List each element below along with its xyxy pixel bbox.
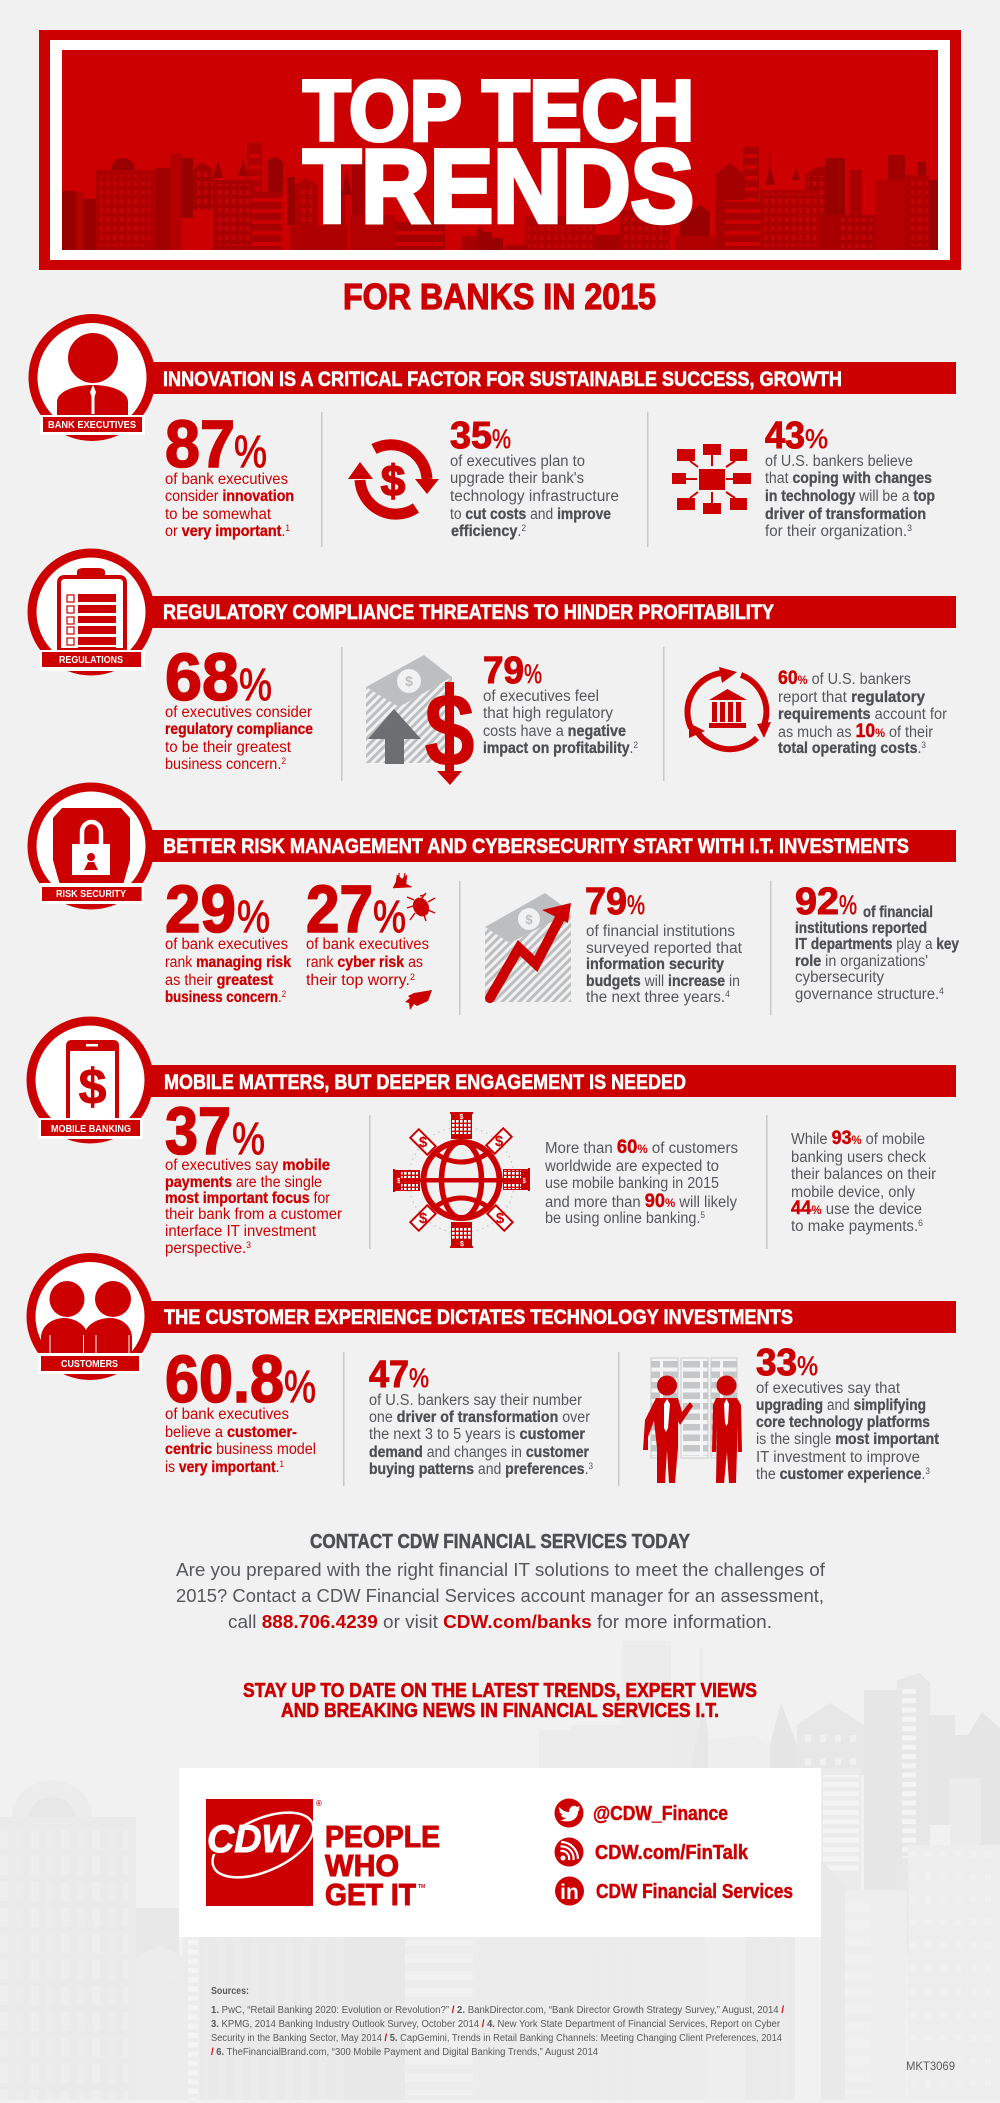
stat: 43% coping with changes: for their organization. <box>765 523 911 540</box>
stat: 93% check balances: to make payments. <box>791 1218 922 1235</box>
stat: 29% managing risk: 2 <box>282 989 286 999</box>
stat: 93% check balances: mobile device, only <box>791 1184 915 1201</box>
title banner <box>39 30 961 270</box>
stat: 79% information security: budgets will increase in <box>586 973 740 990</box>
icon: globe with towers and bills <box>393 1112 530 1248</box>
stat: 79% negative impact <box>483 650 638 757</box>
stat: 37% mobile payments: interface IT investment <box>165 1223 317 1240</box>
stat: 92% IT departments: 4 <box>939 986 944 996</box>
stat: 79% information security: 4 <box>725 989 730 999</box>
contact heading: CONTACT CDW FINANCIAL SERVICES TODAY <box>310 1531 691 1553</box>
stat: 35% cut costs: % <box>492 424 511 454</box>
stat: 33% core technology: core technology platforms <box>756 1414 930 1431</box>
stat: 27% cyber risk: their top worry. <box>306 972 407 989</box>
stat: 27% cyber risk: 2 <box>410 972 415 982</box>
stat: 37% mobile payments: perspective. <box>165 1240 249 1257</box>
stat: 33% core technology: 33 <box>756 1342 797 1384</box>
stat: 79% information security: the next three years. <box>586 989 727 1006</box>
stat: 29% managing risk: 29 <box>165 872 236 947</box>
stat: 37% mobile payments: most important focus for <box>165 1190 330 1207</box>
icon: money and arrows <box>366 655 475 789</box>
stat: 93% check balances: their balances on their <box>791 1166 936 1183</box>
stat: 29% managing risk: rank managing risk <box>165 954 291 971</box>
stat: 29% managing risk: % <box>237 891 270 942</box>
badge: mobile banking: MOBILE BANKING <box>51 1123 131 1135</box>
stat: 29% managing risk: as their greatest <box>165 972 273 989</box>
stat: 93% check balances <box>791 1128 936 1235</box>
stat: 60.8% customer-centric: 1 <box>279 1459 284 1469</box>
tagline: PEOPLE <box>325 1819 440 1854</box>
stat: 60% mobile banking customers: 5 <box>700 1210 705 1220</box>
stat: 60% mobile banking customers: use mobile banking in 2015 <box>545 1175 719 1192</box>
icon: bug middle <box>407 893 435 921</box>
stat: 35% cut costs: to cut costs and improve <box>450 506 611 523</box>
stat: 92% IT departments: % <box>839 890 857 920</box>
icon: globe with towers and bills: $ <box>460 1114 464 1121</box>
stat: 29% managing risk: of bank executives <box>165 936 288 953</box>
stat: 92% IT departments: governance structure. <box>795 986 945 1003</box>
stat: 60.8% customer-centric: centric business model <box>165 1441 316 1458</box>
section 2 heading banner <box>140 596 956 628</box>
stat: 29% managing risk <box>165 872 291 1006</box>
title text <box>303 64 694 245</box>
sources: Security in the Banking Sector, May 2014 / 5. CapGemini, Trends in Retail Banking Channels: Meeting Changing Client Preferences, 2014 <box>211 2033 782 2044</box>
stat: 47% customer demand: of U.S. bankers say their number <box>369 1392 582 1409</box>
twitter handle: @CDW_Finance <box>593 1803 728 1825</box>
stat: 60% operating costs: total operating costs. <box>778 740 930 757</box>
title text: TOP TECH <box>303 64 694 159</box>
stat: 37% mobile payments <box>165 1094 342 1257</box>
CDW logo: CDW <box>207 1818 300 1861</box>
stay up to date callout: AND BREAKING NEWS IN FINANCIAL SERVICES I.T. <box>281 1700 719 1722</box>
stat: 35% cut costs: 2 <box>521 523 526 533</box>
badge: mobile banking <box>31 1021 149 1139</box>
linkedin name: CDW Financial Services <box>596 1881 793 1903</box>
stat: 87% innovation: to be somewhat <box>165 506 272 523</box>
icon: globe with towers and bills: $ <box>495 1133 504 1150</box>
stat: 47% customer demand: 3 <box>588 1461 593 1471</box>
stat: 92% IT departments: of financial <box>863 904 933 921</box>
stat: 33% core technology: 3 <box>925 1466 930 1476</box>
stat: 35% cut costs: of executives plan to <box>450 453 585 470</box>
stat: 60.8% customer-centric: believe a customer- <box>165 1424 297 1441</box>
stat: 37% mobile payments: payments are the single <box>165 1174 322 1191</box>
stat: 92% IT departments: role in organizations' <box>795 953 928 970</box>
contact text: call 888.706.4239 or visit CDW.com/banks for more information. <box>228 1611 772 1632</box>
subtitle: FOR BANKS IN 2015 <box>343 276 656 317</box>
stat: 35% cut costs: upgrade their bank's <box>450 470 584 487</box>
stat: 92% IT departments: cybersecurity <box>795 969 884 986</box>
section 1 heading banner <box>140 362 956 394</box>
stat: 79% negative impact: of executives feel <box>483 688 599 705</box>
stat: 93% check balances: 44% use the device <box>791 1198 922 1219</box>
stay up to date callout <box>243 1680 757 1722</box>
icon: globe with towers and bills: $ <box>397 1178 401 1185</box>
stat: 35% cut costs <box>450 415 619 540</box>
stat: 43% coping with changes: that coping with changes <box>765 470 932 487</box>
stat: 60% operating costs: report that regulatory <box>778 689 925 706</box>
icon: bug top <box>393 873 412 888</box>
stat: 79% information security: surveyed reported that <box>586 940 743 957</box>
stat: 60% operating costs: 60% of U.S. bankers <box>778 668 911 689</box>
stat: 87% innovation: of bank executives <box>165 471 288 488</box>
stat: 79% negative impact: 2 <box>633 740 638 750</box>
stat: 47% customer demand: one driver of transformation over <box>369 1409 590 1426</box>
stat: 68% regulatory compliance: of executives consider <box>165 704 312 721</box>
sources <box>211 1986 784 2058</box>
section 4 heading banner: MOBILE MATTERS, BUT DEEPER ENGAGEMENT IS NEEDED <box>164 1071 686 1094</box>
CDW logo <box>203 1799 323 1906</box>
icon: globe with towers and bills: $ <box>496 1210 505 1227</box>
stat: 79% negative impact: impact on profitability. <box>483 740 645 757</box>
stat: 37% mobile payments: their bank from a customer <box>165 1206 342 1223</box>
section 3 heading banner: BETTER RISK MANAGEMENT AND CYBERSECURITY START WITH I.T. INVESTMENTS <box>163 835 909 858</box>
stat: 33% core technology: is the single most important <box>756 1431 939 1448</box>
stat: 43% coping with changes: driver of transformation <box>765 506 926 523</box>
icon: globe with towers and bills: $ <box>419 1210 428 1227</box>
stat: 47% customer demand: % <box>409 1363 429 1393</box>
badge: risk security <box>32 787 150 905</box>
tagline: GET IT <box>325 1877 416 1912</box>
icon: linkedin <box>555 1876 584 1906</box>
sources: 1. PwC, “Retail Banking 2020: Evolution or Revolution?” / 2. BankDirector.com, “Bank Director Growth Strategy Survey,” August, 2014 / <box>211 2005 784 2016</box>
section 2 heading banner: REGULATORY COMPLIANCE THREATENS TO HINDER PROFITABILITY <box>163 601 774 624</box>
stat: 68% regulatory compliance: % <box>239 659 272 710</box>
badge: bank executives: BANK EXECUTIVES <box>48 419 136 431</box>
contact text: Are you prepared with the right financial IT solutions to meet the challenges of <box>176 1559 826 1580</box>
stat: 43% coping with changes: % <box>805 424 828 454</box>
stat: 68% regulatory compliance: business concern. <box>165 756 290 773</box>
sources: / 6. TheFinancialBrand.com, “300 Mobile Payment and Digital Banking Trends,” August 2014 <box>211 2047 598 2058</box>
badge: bank executives <box>33 318 151 436</box>
badge: risk security: RISK SECURITY <box>56 888 126 900</box>
tagline <box>325 1819 440 1912</box>
stat: 92% IT departments: institutions reported <box>795 920 927 937</box>
badge: regulations <box>32 553 150 671</box>
stat: 35% cut costs: technology infrastructure <box>450 488 619 505</box>
stat: 60.8% customer-centric: % <box>284 1361 316 1412</box>
stat: 35% cut costs: efficiency. <box>451 523 523 540</box>
badge: customers <box>31 1258 149 1376</box>
stat: 43% coping with changes <box>765 415 935 540</box>
stat: 37% mobile payments: 3 <box>246 1240 251 1250</box>
stat: 68% regulatory compliance <box>165 640 313 773</box>
stat: 68% regulatory compliance: to be their greatest <box>165 739 292 756</box>
stat: 92% IT departments: 92 <box>795 881 839 923</box>
icon: servers and two men <box>643 1358 742 1483</box>
stat: 79% information security: information security <box>586 956 724 973</box>
tagline: WHO <box>325 1848 399 1883</box>
stat: 29% managing risk: business concern. <box>165 989 297 1006</box>
stat: 68% regulatory compliance: regulatory compliance <box>165 721 313 738</box>
stat: 79% information security: 79 <box>585 881 627 923</box>
stat: 87% innovation: or very important. <box>165 523 289 540</box>
section 4 heading banner <box>140 1065 956 1097</box>
stat: 79% negative impact: % <box>524 659 542 689</box>
stat: 60% mobile banking customers: More than 60% of customers <box>545 1137 738 1158</box>
stat: 79% information security: % <box>627 890 645 920</box>
icon: rocket <box>405 990 432 1010</box>
stat: 60% operating costs: 3 <box>921 740 926 750</box>
section 3 heading banner <box>140 830 956 862</box>
stat: 79% negative impact: 79 <box>483 650 524 692</box>
panel: CDW contact card <box>179 1768 821 1937</box>
section 5 heading banner: THE CUSTOMER EXPERIENCE DICTATES TECHNOLOGY INVESTMENTS <box>164 1306 793 1329</box>
man standing <box>712 1376 742 1483</box>
stat: 47% customer demand <box>369 1354 593 1478</box>
stat: 60% mobile banking customers <box>544 1137 738 1227</box>
stat: 27% cyber risk: rank cyber risk as <box>306 954 423 971</box>
stat: 27% cyber risk <box>306 872 429 989</box>
stat: 60% operating costs: requirements account for <box>778 706 947 723</box>
stat: 68% regulatory compliance: 2 <box>281 756 286 766</box>
CDW logo: ® <box>316 1799 322 1808</box>
stay up to date callout: STAY UP TO DATE ON THE LATEST TRENDS, EXPERT VIEWS <box>243 1680 757 1702</box>
icon: dollar cycle <box>348 445 439 514</box>
section 1 heading banner: INNOVATION IS A CRITICAL FACTOR FOR SUSTAINABLE SUCCESS, GROWTH <box>163 368 842 391</box>
badge: regulations: REGULATIONS <box>59 654 123 666</box>
stat: 93% check balances: While 93% of mobile <box>791 1128 925 1149</box>
section 5 heading banner <box>140 1301 956 1333</box>
icon: linkedin: in <box>560 1881 579 1904</box>
stat: 27% cyber risk: of bank executives <box>306 936 429 953</box>
stat: 27% cyber risk: 27 <box>306 872 373 947</box>
contact text: 2015? Contact a CDW Financial Services account manager for an assessment, <box>176 1585 824 1606</box>
stat: 43% coping with changes: 43 <box>765 415 805 457</box>
title text: TRENDS <box>303 129 694 245</box>
stat: 47% customer demand: 47 <box>369 1354 409 1396</box>
stat: 60.8% customer-centric: is very important. <box>165 1459 287 1476</box>
icon: globe with towers and bills: $ <box>522 1178 526 1185</box>
stat: 79% negative impact: costs have a negative <box>483 723 626 740</box>
stat: 43% coping with changes: of U.S. bankers believe <box>765 453 913 470</box>
icon: dollar cycle: $ <box>381 457 405 506</box>
man pointing <box>643 1376 693 1483</box>
stat: 79% information security: of financial institutions <box>586 923 735 940</box>
stat: 47% customer demand: demand and changes in customer <box>369 1444 589 1461</box>
stat: 87% innovation: % <box>234 426 267 477</box>
stat: 93% check balances: 6 <box>918 1218 923 1228</box>
stat: 37% mobile payments: of executives say mobile <box>165 1157 330 1174</box>
stat: 43% coping with changes: in technology will be a top <box>765 488 935 505</box>
stat: 33% core technology: the customer experience. <box>756 1466 935 1483</box>
stat: 37% mobile payments: 37 <box>165 1094 231 1169</box>
stat: 79% negative impact: that high regulatory <box>483 705 613 722</box>
footer skyline background <box>0 1641 1000 2100</box>
stat: 33% core technology: % <box>797 1351 818 1381</box>
rss link: CDW.com/FinTalk <box>595 1842 749 1864</box>
icon: twitter <box>554 1798 584 1828</box>
banner skyline <box>62 143 938 250</box>
stat: 33% core technology: IT investment to improve <box>756 1449 920 1466</box>
badge: mobile banking: $ <box>79 1059 107 1115</box>
stat: 43% coping with changes: 3 <box>907 523 912 533</box>
stat: 87% innovation: consider innovation <box>165 488 294 505</box>
icon: globe with towers and bills: $ <box>419 1134 428 1151</box>
stat: 33% core technology: of executives say that <box>756 1380 901 1397</box>
icon: money and arrows: $ <box>424 672 475 789</box>
stat: 47% customer demand: buying patterns and preferences. <box>369 1461 593 1478</box>
icon: rss <box>554 1838 584 1866</box>
stat: 60% mobile banking customers: worldwide are expected to <box>544 1158 719 1175</box>
stat: 60% operating costs <box>778 668 947 757</box>
icon: bank cycle <box>687 667 771 749</box>
stat: 27% cyber risk: % <box>373 891 406 942</box>
sources: 3. KPMG, 2014 Banking Industry Outlook Survey, October 2014 / 4. New York State Department of Financial Services, Report on Cyber <box>211 2019 781 2030</box>
stat: 60.8% customer-centric: 60.8 <box>165 1342 284 1417</box>
badge: customers: CUSTOMERS <box>61 1358 118 1370</box>
stat: 60% mobile banking customers: be using online banking. <box>545 1210 712 1227</box>
stat: 37% mobile payments: % <box>232 1113 265 1164</box>
stat: 92% IT departments <box>795 881 959 1003</box>
stat: 35% cut costs: 35 <box>450 415 492 457</box>
stat: 60% mobile banking customers: and more than 90% will likely <box>545 1191 737 1212</box>
icon: globe with towers and bills: $ <box>460 1241 464 1248</box>
stat: 33% core technology: upgrading and simplifying <box>756 1397 926 1414</box>
stat: 60.8% customer-centric <box>165 1342 316 1476</box>
contact text <box>176 1559 826 1632</box>
stat: 87% innovation: 1 <box>285 523 290 533</box>
icon: money with rising arrow <box>485 893 571 1002</box>
stat: 33% core technology <box>756 1342 939 1483</box>
sources: Sources: <box>211 1986 249 1997</box>
stat: 92% IT departments: IT departments play a key <box>795 936 959 953</box>
stat: 60% operating costs: as much as 10% of their <box>778 721 933 742</box>
stat: 47% customer demand: the next 3 to 5 years is customer <box>369 1426 585 1443</box>
icon: money and arrows: $ <box>405 673 413 689</box>
icon: network <box>672 444 751 514</box>
stat: 93% check balances: banking users check <box>791 1149 926 1166</box>
stat: 60.8% customer-centric: of bank executives <box>165 1406 289 1423</box>
stat: 87% innovation: 87 <box>165 407 235 482</box>
stat: 68% regulatory compliance: 68 <box>165 640 239 715</box>
icon: money with rising arrow: $ <box>525 912 533 927</box>
stat: 87% innovation <box>165 407 294 540</box>
document code: MKT3069 <box>906 2061 955 2073</box>
tagline: TM <box>418 1884 425 1890</box>
stat: 79% information security <box>585 881 743 1006</box>
